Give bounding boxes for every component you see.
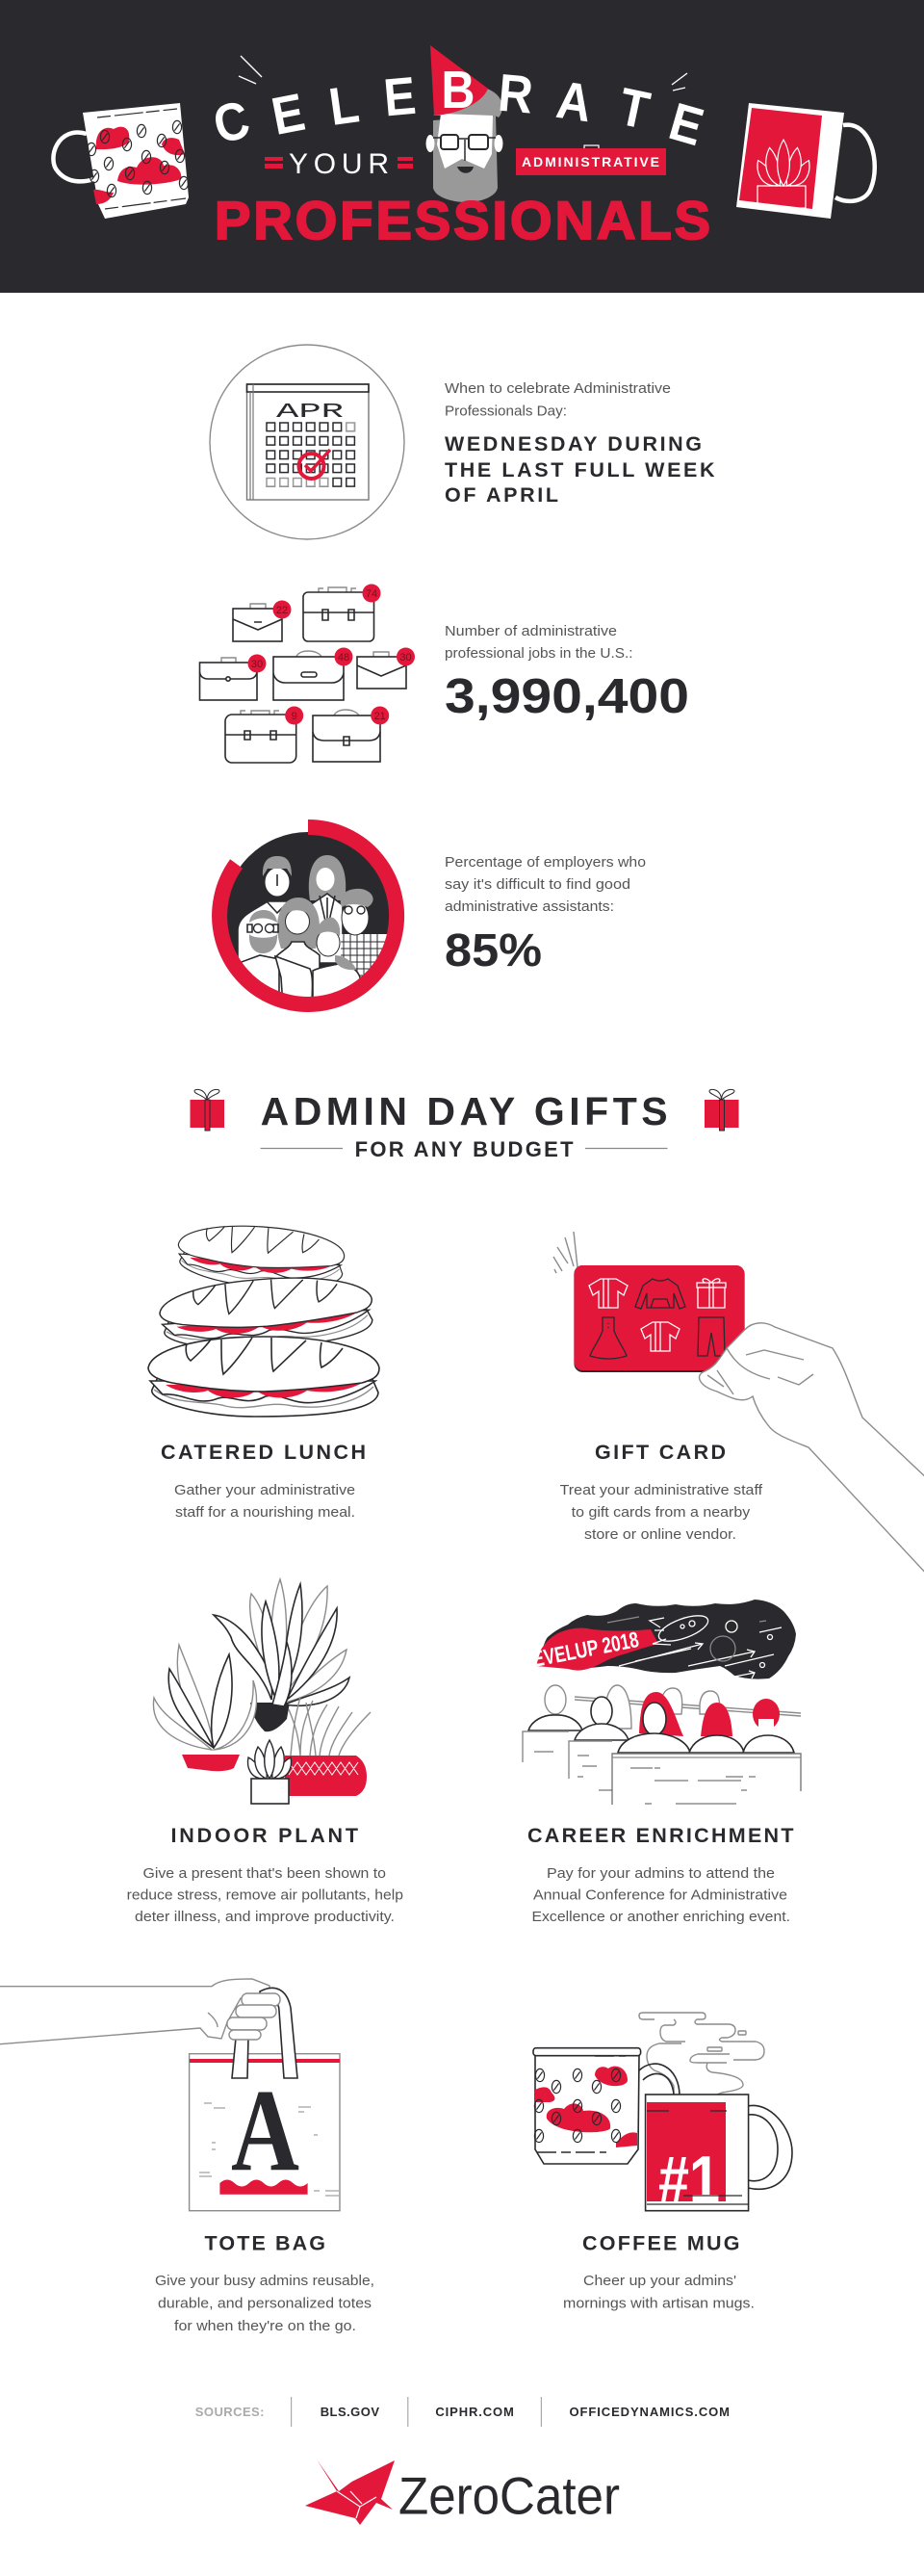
title: PROFESSIONALS: PROFESSIONALS xyxy=(215,190,710,250)
mug label: #1 xyxy=(658,2143,720,2216)
person: man with glasses and plaid shirt xyxy=(341,889,389,982)
illustration: tote bag held by hand xyxy=(0,1979,340,2211)
text: when label xyxy=(445,380,671,420)
icon: calendar: APR xyxy=(276,402,345,424)
text: jobs value: 3,990,400 xyxy=(445,668,689,723)
icon: origami crane xyxy=(305,2459,395,2525)
sources row xyxy=(195,2397,730,2427)
text: difficulty label: say it's difficult to find good xyxy=(445,876,630,893)
icon: briefcases: 22 xyxy=(276,605,288,616)
title: CELEBRATE: C xyxy=(208,91,255,156)
person: bearded man left xyxy=(241,910,312,997)
description: Treat your administrative staff xyxy=(560,1482,763,1498)
person: woman top right xyxy=(309,855,346,963)
label: SOURCES: xyxy=(195,2405,264,2419)
title: CELEBRATE: B xyxy=(442,60,475,119)
description xyxy=(560,1482,763,1543)
description: to gift cards from a nearby xyxy=(572,1504,751,1521)
illustration: stacked sandwiches xyxy=(148,1221,379,1417)
title: ADMINISTRATIVE badge xyxy=(516,145,666,175)
heading text: ADMIN DAY GIFTS xyxy=(261,1089,668,1133)
panel: coffee mug xyxy=(533,2013,792,2311)
header banner xyxy=(0,0,924,293)
title: ADMINISTRATIVE badge: ADMINISTRATIVE xyxy=(522,154,659,169)
icon: right coffee mug xyxy=(736,103,875,219)
icon: right gift xyxy=(705,1089,739,1131)
text: difficulty label: administrative assistants: xyxy=(445,898,614,915)
text: when value: THE LAST FULL WEEK xyxy=(445,458,715,481)
description: mornings with artisan mugs. xyxy=(563,2296,755,2311)
description: staff for a nourishing meal. xyxy=(175,1504,355,1521)
section heading: admin day gifts xyxy=(191,1089,739,1161)
heading: TOTE BAG xyxy=(204,2232,325,2255)
text: when value: WEDNESDAY DURING xyxy=(445,432,702,455)
chart: 85 percent ring with people xyxy=(219,827,397,1006)
person: girl right xyxy=(313,918,360,1006)
illustration: potted plants xyxy=(153,1579,371,1804)
heading: CAREER ENRICHMENT xyxy=(527,1824,793,1847)
description: for when they're on the go. xyxy=(174,2318,356,2334)
description: Cheer up your admins' xyxy=(583,2273,736,2289)
description: durable, and personalized totes xyxy=(158,2296,372,2311)
icon: briefcases: 21 xyxy=(374,711,386,722)
source links xyxy=(321,2405,730,2419)
heading: GIFT CARD xyxy=(595,1441,726,1464)
text: jobs label xyxy=(445,623,633,662)
description xyxy=(155,2273,374,2334)
title: CELEBRATE: E xyxy=(268,83,310,147)
description: Pay for your admins to attend the xyxy=(547,1865,775,1882)
description: Give a present that's been shown to xyxy=(142,1865,386,1882)
person: man top left xyxy=(239,856,292,961)
logo: ZeroCater xyxy=(305,2459,620,2526)
panel: indoor plant xyxy=(127,1579,403,1925)
title: CELEBRATE: R xyxy=(496,64,535,125)
text: difficulty label: Percentage of employers who xyxy=(445,854,646,871)
title: CELEBRATE: E xyxy=(381,66,419,128)
description: Annual Conference for Administrative xyxy=(533,1887,787,1903)
banner text: LEVELUP 2018 xyxy=(521,1626,641,1674)
icon: left gift xyxy=(191,1089,224,1131)
illustration: gift card in hand xyxy=(553,1232,924,1576)
icon: calendar xyxy=(210,345,404,539)
description: reduce stress, remove air pollutants, help xyxy=(127,1887,403,1903)
wordmark: ZeroCater xyxy=(398,2466,620,2526)
stat: hiring difficulty xyxy=(219,827,646,1006)
title: CELEBRATE: E xyxy=(663,92,709,158)
panel: tote bag xyxy=(0,1979,374,2334)
heading: INDOOR PLANT xyxy=(171,1824,358,1847)
description xyxy=(563,2273,755,2311)
title: YOUR: YOUR xyxy=(289,148,389,180)
icon: briefcases: 9 xyxy=(292,711,297,722)
source links: OFFICEDYNAMICS.COM xyxy=(570,2405,730,2419)
person: woman center xyxy=(273,898,321,964)
description: store or online vendor. xyxy=(584,1526,736,1543)
description: Give your busy admins reusable, xyxy=(155,2273,374,2289)
description: Gather your administrative xyxy=(174,1482,355,1498)
text: when label: Professionals Day: xyxy=(445,403,567,420)
description: Excellence or another enriching event. xyxy=(531,1909,790,1925)
title: CELEBRATE: T xyxy=(614,78,654,141)
text: jobs label: professional jobs in the U.S.: xyxy=(445,645,633,662)
front row attendees xyxy=(618,1699,794,1753)
title: YOUR xyxy=(265,148,413,180)
description: deter illness, and improve productivity. xyxy=(135,1909,395,1925)
text: when label: When to celebrate Administrative xyxy=(445,380,671,397)
title: CELEBRATE: L xyxy=(325,75,363,138)
illustration: two coffee mugs with steam xyxy=(533,2013,792,2216)
description xyxy=(531,1865,790,1925)
stat: number of jobs xyxy=(200,584,689,763)
panel: catered lunch xyxy=(148,1221,379,1521)
title: CELEBRATE xyxy=(208,60,709,158)
description xyxy=(127,1865,403,1925)
icon: left coffee mug xyxy=(53,103,189,219)
text: jobs label: Number of administrative xyxy=(445,623,617,639)
illustration: conference audience and screen xyxy=(521,1600,801,1805)
stat: when to celebrate xyxy=(210,345,715,539)
back row attendees xyxy=(523,1685,732,1779)
icon: briefcases: 30 xyxy=(399,652,412,664)
text: difficulty value: 85% xyxy=(445,925,542,976)
text: difficulty label xyxy=(445,854,646,915)
panel: career enrichment xyxy=(521,1600,801,1925)
character: party hat man xyxy=(425,45,502,202)
text: when value: OF APRIL xyxy=(445,483,558,507)
source links: BLS.GOV xyxy=(321,2405,379,2419)
heading: CATERED LUNCH xyxy=(161,1441,366,1464)
icon: briefcases: 74 xyxy=(366,588,377,600)
panel: gift card xyxy=(553,1232,924,1576)
heading: COFFEE MUG xyxy=(582,2232,739,2255)
title: CELEBRATE: A xyxy=(553,71,595,134)
icon: briefcases: 48 xyxy=(338,652,349,664)
description xyxy=(174,1482,355,1521)
tote letter: A xyxy=(231,2066,299,2196)
icon: briefcases: 30 xyxy=(251,659,263,670)
decorative sparks xyxy=(239,56,687,91)
subheading text: FOR ANY BUDGET xyxy=(355,1137,574,1161)
text: when value xyxy=(445,432,715,507)
icon: briefcases xyxy=(200,584,415,763)
source links: CIPHR.COM xyxy=(435,2405,514,2419)
